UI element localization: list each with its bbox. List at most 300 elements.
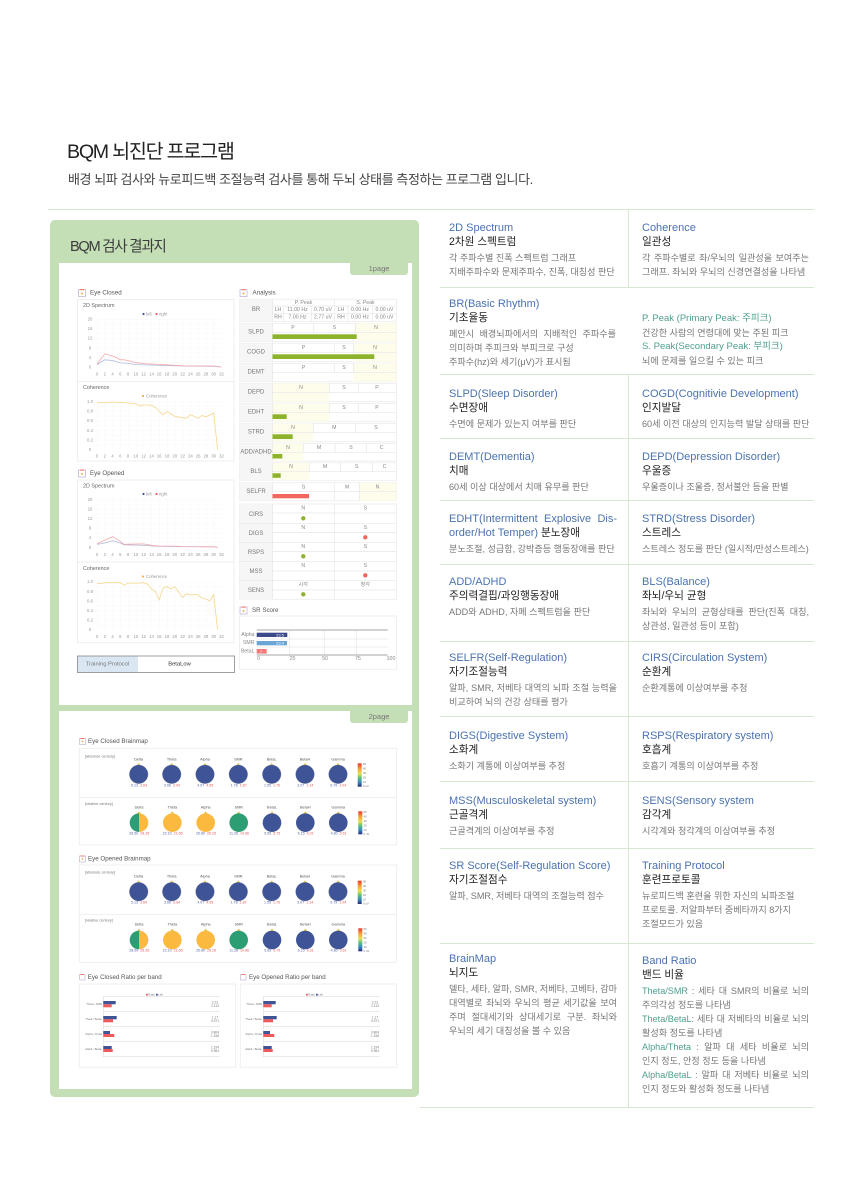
glossary: SENS: 감각계 bbox=[642, 809, 671, 821]
glossary: BR bbox=[449, 298, 616, 367]
table: organ systems: N bbox=[301, 525, 305, 531]
brainmap row: closed relative: Gamma bbox=[332, 806, 346, 810]
brainmap row: opened absolute: 4.07 bbox=[197, 901, 204, 905]
table row: BLS bbox=[240, 463, 396, 480]
chart: Eye Opened ratio bars: Alpha / BetaL bbox=[245, 1047, 262, 1051]
brainmap row: closed absolute: 0 uV bbox=[363, 784, 369, 788]
table row: STRD: S bbox=[374, 425, 378, 431]
brainmap row: closed relative: 40 bbox=[364, 814, 367, 818]
panel heading: BQM 검사 결과지 bbox=[70, 239, 165, 255]
heading: Eye Opened Ratio per band: Eye Opened Ratio per band bbox=[249, 974, 326, 981]
subtitle: 배경 뇌파 검사와 뉴로피드백 조절능력 검사를 통해 두뇌 상태를 측정하는 프로그램 입니다. bbox=[68, 172, 533, 187]
brainmap row: opened absolute: 4.55 bbox=[206, 901, 213, 905]
panel: Eye Closed Brainmap bbox=[79, 748, 397, 845]
brainmap row: opened absolute: 40 bbox=[363, 884, 367, 888]
chart: closed coherence: 26 bbox=[196, 454, 201, 458]
tab: 1page: 1page bbox=[369, 264, 389, 273]
brainmap row: closed absolute: 3.07 bbox=[297, 784, 304, 788]
brainmap row: opened relative: 5.65 bbox=[264, 948, 271, 952]
glossary: Training Protocol: 뉴로피드백 훈련을 위한 자신의 뇌파조절 bbox=[642, 891, 794, 901]
glossary: BrainMap: 델타, 세타, 알파, SMR, 저베타, 고베타, 감마 bbox=[449, 984, 617, 994]
heading: Analysis: Analysis bbox=[252, 290, 276, 296]
glossary: ADD/ADHD: 주의력결핍/과잉행동장애 bbox=[449, 590, 559, 602]
glossary: STRD bbox=[642, 512, 809, 554]
chart: opened coherence: 0 bbox=[96, 634, 99, 639]
table: organ systems: S bbox=[364, 525, 368, 531]
chart: Eye Closed ratio bars: 2.113 bbox=[211, 1004, 219, 1008]
chart: closed coherence: 18 bbox=[165, 454, 170, 458]
brainmap row: closed absolute: Theta bbox=[167, 758, 177, 762]
chart: Eye Closed ratio bars: Left bbox=[158, 993, 163, 997]
table row: DEPD: DEPD bbox=[248, 390, 265, 396]
glossary: DIGS: DIGS(Digestive System) bbox=[449, 730, 568, 742]
table row: BLS: N bbox=[289, 464, 293, 470]
brainmap row: opened relative: 5.61 bbox=[340, 948, 347, 952]
chart: opened coherence: 6 bbox=[119, 634, 122, 639]
chart: opened coherence: 0.2 bbox=[87, 618, 94, 623]
glossary: Band Ratio: Alpha/BetaL : 알파 대 저베타 비율로 뇌의 bbox=[642, 1070, 809, 1080]
brainmap row: opened absolute: Gamma bbox=[331, 874, 346, 878]
table row: COGD: N bbox=[373, 345, 377, 351]
glossary: peaks bbox=[642, 312, 788, 366]
glossary: peaks: 뇌에 문제를 일으킬 수 있는 피크 bbox=[642, 356, 763, 366]
table: organ systems: N bbox=[301, 544, 305, 550]
glossary: MSS: MSS(Musculoskeletal system) bbox=[449, 795, 596, 807]
chart: closed 2D spectrum: 32 bbox=[219, 372, 224, 376]
table row: DEPD: S bbox=[342, 385, 346, 391]
table: organ systems: N bbox=[301, 563, 305, 569]
chart: opened 2D spectrum: 16 bbox=[157, 552, 162, 557]
chart: closed coherence: 28 bbox=[204, 454, 209, 458]
chart: closed coherence: 30 bbox=[211, 454, 217, 458]
chart: Eye Closed ratio bars: 1.154 bbox=[211, 1046, 219, 1050]
training protocol box bbox=[78, 656, 234, 672]
glossary: SR Score: 알파, SMR, 저베타 대역의 조절능력 점수 bbox=[449, 891, 604, 901]
glossary: SR Score: SR Score(Self-Regulation Score) bbox=[449, 860, 610, 872]
brainmap row: closed absolute: 30 bbox=[363, 771, 367, 775]
table: organ systems: 시각 bbox=[299, 581, 308, 588]
brainmap row: closed relative: 26.80 bbox=[196, 832, 205, 836]
brainmap row: opened relative: 20 bbox=[364, 940, 367, 944]
chart: closed 2D spectrum: 30 bbox=[211, 372, 217, 376]
brainmap row: closed absolute: 3.66 bbox=[164, 784, 171, 788]
table row: SLPD: S bbox=[333, 325, 337, 331]
brainmap row: closed absolute: BetaH bbox=[300, 758, 311, 762]
chart: opened coherence: 14 bbox=[149, 634, 154, 639]
panel: Eye Opened Brainmap bbox=[79, 865, 397, 962]
chart: closed 2D spectrum: 14 bbox=[149, 372, 154, 376]
chart: closed coherence: 6 bbox=[119, 454, 122, 458]
chart: closed 2D spectrum: 16 bbox=[88, 326, 93, 331]
glossary: Band Ratio: 주의각성 정도를 나타냄 bbox=[642, 1000, 731, 1010]
glossary: Band Ratio: Theta/SMR : 세타 대 SMR의 비율로 뇌의 bbox=[642, 986, 809, 996]
table: organ systems: RSPS bbox=[248, 550, 264, 556]
chart: opened coherence: 0.8 bbox=[87, 589, 94, 594]
glossary: Coherence: 일관성 bbox=[642, 236, 671, 248]
glossary: Training Protocol bbox=[642, 860, 794, 929]
glossary: DEMT: DEMT(Dementia) bbox=[449, 451, 535, 463]
heading: Analysis bbox=[240, 289, 276, 296]
glossary: Band Ratio: 인지 정도, 안정 정도 등을 나타냄 bbox=[642, 1056, 766, 1066]
glossary: Band Ratio: 밴드 비율 bbox=[642, 969, 684, 981]
table row: EDHT bbox=[240, 403, 396, 422]
glossary: COGD: 인지발달 bbox=[642, 402, 681, 414]
table row: DEMT: S bbox=[342, 365, 346, 371]
brainmap row: closed relative: [relative century] bbox=[85, 802, 113, 806]
chart: Eye Closed ratio bars: Alpha / BetaL bbox=[85, 1047, 102, 1051]
glossary: Training Protocol: 조절모드가 있음 bbox=[642, 919, 703, 929]
brainmap row: closed absolute: 0.79 bbox=[330, 784, 337, 788]
chart: opened coherence: Coherence bbox=[83, 566, 109, 572]
brainmap row: closed absolute: 50 bbox=[363, 762, 367, 766]
chart: closed coherence: 32 bbox=[219, 454, 224, 458]
brainmap row: closed relative: 10 bbox=[364, 828, 367, 832]
table: BR: 0.00 uV bbox=[376, 314, 394, 320]
heading: Eye Opened: Eye Opened bbox=[90, 470, 125, 477]
glossary: STRD: 스트레스 bbox=[642, 526, 681, 538]
glossary: 2D Spectrum: 2D Spectrum bbox=[449, 222, 513, 234]
chart: closed coherence: Coherence bbox=[83, 385, 109, 391]
table row: DEPD bbox=[240, 383, 396, 402]
brainmap row: opened absolute: 3.66 bbox=[164, 901, 171, 905]
table: organ systems: MSS bbox=[249, 569, 263, 575]
chart: opened coherence: 16 bbox=[157, 634, 162, 639]
brainmap row: closed absolute: 40 bbox=[363, 766, 367, 770]
chart: SR Score bars: 23.4 bbox=[276, 641, 285, 646]
chart: Eye Opened ratio bars: Right bbox=[308, 993, 315, 997]
glossary: Band Ratio: Band Ratio bbox=[642, 955, 696, 967]
brainmap row: closed relative: 10.86 bbox=[240, 832, 249, 836]
glossary: BR: 기초율동 bbox=[449, 312, 488, 324]
chart: closed coherence: 10 bbox=[134, 454, 139, 458]
chart: closed 2D spectrum: 6 bbox=[119, 372, 122, 376]
heading: SR Score bbox=[240, 606, 279, 614]
glossary: DIGS: 소화계 bbox=[449, 744, 478, 756]
table row: STRD bbox=[240, 423, 396, 442]
glossary: 2D Spectrum: 각 주파수별 진폭 스펙트럼 그래프 bbox=[449, 253, 576, 263]
brainmap row: closed relative: 26.28 bbox=[207, 832, 216, 836]
table: BR bbox=[240, 299, 396, 321]
table row: DEPD: P bbox=[375, 385, 379, 391]
glossary: SLPD bbox=[449, 388, 576, 428]
brainmap row: closed absolute: SMR bbox=[234, 758, 243, 762]
brainmap row: closed relative: 20 bbox=[364, 824, 367, 828]
brainmap row: opened relative: Gamma bbox=[332, 922, 346, 926]
glossary: Band Ratio: Theta/BetaL: 세타 대 저베타의 비율로 뇌의 bbox=[642, 1014, 809, 1024]
table row: BLS: C bbox=[383, 464, 387, 470]
table row: BLS: M bbox=[323, 464, 327, 470]
table row: EDHT: P bbox=[375, 405, 379, 411]
chart: SR Score bars: BetaL bbox=[241, 648, 255, 654]
chart: closed 2D spectrum: 20 bbox=[172, 372, 178, 376]
glossary: Band Ratio: 인지 정도와 활성화 정도를 나타냄 bbox=[642, 1084, 769, 1094]
chart: closed 2D spectrum: 24 bbox=[188, 372, 193, 376]
glossary: STRD: 스트레스 정도를 판단 (일시적/만성스트레스) bbox=[642, 544, 809, 554]
brainmap row: closed absolute: Delta bbox=[134, 758, 144, 762]
chart: opened 2D spectrum: 14 bbox=[149, 552, 154, 557]
table row: DEMT: P bbox=[302, 365, 306, 371]
chart: closed coherence: Coherence bbox=[146, 394, 168, 398]
brainmap row: opened relative: BetaH bbox=[300, 922, 311, 926]
glossary: SELFR: 알파, SMR, 저베타 대역의 뇌파 조절 능력을 bbox=[449, 683, 617, 693]
chart: opened 2D spectrum: 4 bbox=[111, 552, 114, 557]
brainmap row: opened relative: 6.31 bbox=[307, 948, 314, 952]
chart: closed 2D spectrum: 2D Spectrum bbox=[83, 303, 115, 309]
chart: closed 2D spectrum: 10 bbox=[134, 372, 139, 376]
glossary: BLS: 좌뇌와 우뇌의 균형상태를 판단(진폭 대칭, bbox=[642, 607, 809, 617]
table: BR: P. Peak bbox=[295, 300, 313, 306]
chart: SR Score bars: 0 bbox=[257, 656, 260, 662]
chart: SR Score bars: 100 bbox=[387, 656, 395, 662]
chart: closed 2D spectrum: 22 bbox=[180, 372, 186, 376]
brainmap row: opened relative: Alpha bbox=[201, 922, 211, 926]
chart: Eye Opened ratio bars: 0.971 bbox=[371, 1019, 379, 1023]
table: BR: S. Peak bbox=[356, 300, 375, 306]
chart: opened coherence: 0 bbox=[89, 627, 92, 632]
table row: COGD: COGD bbox=[247, 350, 266, 356]
glossary: DEMT: 60세 이상 대상에서 치매 유무를 판단 bbox=[449, 482, 589, 492]
brainmap row: closed absolute: 3.64 bbox=[140, 784, 147, 788]
brainmap row: opened absolute: [absolute century] bbox=[85, 871, 115, 875]
chart: opened 2D spectrum: 18 bbox=[165, 552, 170, 557]
brainmap row: opened relative: Theta bbox=[167, 922, 178, 926]
glossary: EDHT bbox=[449, 512, 617, 554]
glossary: SENS bbox=[642, 795, 775, 836]
table row: ADD/ADHD: N bbox=[286, 445, 290, 451]
brainmap row: opened absolute: Theta bbox=[167, 874, 177, 878]
chart: opened coherence: 10 bbox=[134, 634, 139, 639]
chart: opened 2D spectrum: 20 bbox=[88, 497, 93, 502]
table row: STRD: STRD bbox=[248, 430, 265, 436]
glossary: ADD/ADHD bbox=[449, 576, 590, 617]
brainmap row: opened relative: 28.50 bbox=[129, 948, 138, 952]
brainmap row: opened absolute: 0 uV bbox=[363, 902, 369, 906]
table row: SLPD: P bbox=[291, 325, 295, 331]
page 1 sheet bbox=[59, 263, 412, 705]
brainmap row: opened relative: 11.28 bbox=[229, 948, 238, 952]
brainmap row: opened relative: 21.65 bbox=[174, 948, 183, 952]
chart: closed coherence: 0 bbox=[96, 454, 99, 458]
table: organ systems bbox=[240, 504, 396, 599]
chart: opened 2D spectrum: 8 bbox=[89, 526, 92, 531]
glossary: Band Ratio: Alpha/Theta : 알파 대 세타 비율로 뇌의 bbox=[642, 1042, 809, 1052]
glossary: BrainMap: 우뇌의 세기 대칭성을 볼 수 있음 bbox=[449, 1026, 570, 1036]
table row: ADD/ADHD bbox=[240, 443, 396, 461]
chart: opened 2D spectrum: 8 bbox=[127, 552, 130, 557]
brainmap row: opened relative: 50 bbox=[364, 927, 367, 931]
table row: EDHT: S bbox=[342, 405, 346, 411]
brainmap row: opened absolute: 1.76 bbox=[273, 901, 280, 905]
glossary: BrainMap: 뇌지도 bbox=[449, 967, 478, 979]
chart: closed coherence: 8 bbox=[127, 454, 130, 458]
chart: closed 2D spectrum: 0 bbox=[89, 364, 92, 370]
brainmap row: closed relative bbox=[85, 802, 369, 836]
glossary: 2D Spectrum bbox=[449, 222, 615, 277]
table: BR: 0.00 Hz bbox=[351, 314, 369, 320]
brainmap row: opened relative bbox=[85, 918, 369, 953]
table: organ systems: CIRS bbox=[249, 512, 263, 518]
brainmap row: closed relative: BetaL bbox=[267, 806, 277, 810]
brainmap row: opened absolute: SMR bbox=[234, 874, 243, 878]
glossary: Coherence: Coherence bbox=[642, 222, 696, 234]
brainmap row: closed absolute: 4.07 bbox=[197, 784, 204, 788]
glossary: DEPD: 우울증이나 조울증, 정서불안 등을 판별 bbox=[642, 482, 788, 492]
brainmap row: opened relative: 6.15 bbox=[298, 948, 305, 952]
glossary: DEMT: 치매 bbox=[449, 465, 468, 477]
brainmap row: closed relative: 11.28 bbox=[229, 832, 238, 836]
table row: DEMT: N bbox=[373, 365, 377, 371]
chart: SR Score bars: SMR bbox=[243, 640, 255, 646]
glossary: CIRS: CIRS(Circulation System) bbox=[642, 652, 767, 664]
brainmap row: opened relative: 0 uV bbox=[364, 949, 369, 953]
chart: Eye Closed ratio bars: 0.804 bbox=[211, 1030, 219, 1034]
chart: Eye Closed ratio bars: Theta / BetaL bbox=[85, 1017, 102, 1021]
chart: closed coherence: 14 bbox=[149, 454, 154, 458]
glossary: peaks: S. Peak(Secondary Peak: 부피크) bbox=[642, 341, 783, 352]
glossary: CIRS bbox=[642, 652, 767, 693]
table row: BLS: S bbox=[355, 464, 359, 470]
glossary: BR: 주파수(hz)와 세기(μV)가 표시됨 bbox=[449, 356, 571, 366]
chart: closed 2D spectrum: 12 bbox=[141, 372, 147, 376]
table row: SELFR: M bbox=[345, 484, 349, 490]
glossary: BLS: 상관성, 일관성 등이 포함) bbox=[642, 621, 739, 631]
chart: opened 2D spectrum: 2D Spectrum bbox=[83, 484, 115, 490]
brainmap row: opened absolute: 3.07 bbox=[297, 901, 304, 905]
chart: opened 2D spectrum: 12 bbox=[88, 516, 93, 521]
chart: SR Score bars: 50 bbox=[322, 656, 328, 662]
chart: closed 2D spectrum: 18 bbox=[165, 372, 170, 376]
chart: Eye Closed ratio bars: 1.158 bbox=[211, 1034, 219, 1038]
chart: opened 2D spectrum: 10 bbox=[134, 552, 139, 557]
glossary: Band Ratio: 활성화 정도를 나타냄 bbox=[642, 1028, 722, 1038]
brainmap row: closed absolute: 1.87 bbox=[240, 784, 247, 788]
heading: Eye Opened bbox=[78, 470, 125, 477]
brainmap row: closed absolute: 4.55 bbox=[206, 784, 213, 788]
glossary: STRD: STRD(Stress Disorder) bbox=[642, 512, 755, 524]
glossary: SELFR: 자기조절능력 bbox=[449, 666, 507, 678]
brainmap row: opened relative: [relative century] bbox=[85, 918, 113, 922]
chart: SR Score bars: 23.5 bbox=[276, 632, 285, 638]
brainmap row: opened relative: 26.80 bbox=[196, 948, 205, 952]
glossary: CIRS: 순환계통에 이상여부를 추청 bbox=[642, 683, 747, 693]
table: organ systems: SENS bbox=[248, 588, 264, 594]
tab: 1page bbox=[350, 263, 408, 275]
glossary: RSPS bbox=[642, 730, 773, 771]
table row: COGD: P bbox=[302, 345, 306, 351]
brainmap row: closed relative: 6.31 bbox=[307, 832, 314, 836]
chart: Eye Closed ratio bars: Theta / SMR bbox=[86, 1002, 102, 1006]
chart: Eye Closed ratio bars: 0.964 bbox=[211, 1049, 219, 1053]
chart: closed 2D spectrum: 8 bbox=[127, 372, 130, 376]
chart: Eye Opened ratio bars: 1.154 bbox=[371, 1046, 379, 1050]
chart: Eye Opened ratio bars: Alpha / Theta bbox=[245, 1032, 262, 1036]
chart: closed 2D spectrum: 8 bbox=[89, 345, 92, 350]
glossary: SENS: 시각계와 청각계의 이상여부를 추정 bbox=[642, 826, 775, 836]
training protocol box: Training Protocol bbox=[86, 662, 129, 668]
chart: opened coherence: 0.6 bbox=[87, 598, 94, 603]
chart: opened 2D spectrum: right bbox=[159, 492, 168, 496]
chart: opened coherence: 12 bbox=[141, 634, 147, 639]
glossary: Training Protocol: 훈련프로토콜 bbox=[642, 874, 700, 886]
brainmap row: opened absolute: 1.04 bbox=[339, 901, 346, 905]
table row: COGD bbox=[240, 343, 396, 362]
title: BQM 뇌진단 프로그램 bbox=[67, 141, 234, 163]
glossary: MSS: 근골격계 bbox=[449, 809, 488, 821]
chart: Eye Opened ratio bars: 1.17 bbox=[372, 1016, 378, 1020]
glossary: BrainMap bbox=[449, 953, 617, 1036]
chart: opened coherence: Coherence bbox=[146, 574, 168, 579]
glossary: BR: 의미하며 주피크와 부피크로 구성 bbox=[449, 342, 574, 352]
glossary: DIGS: 소화기 계통에 이상여부를 추정 bbox=[449, 761, 565, 771]
glossary: Training Protocol: 프로토콜. 저알파부터 중베타까지 8가지 bbox=[642, 905, 791, 915]
glossary: DEPD: DEPD(Depression Disorder) bbox=[642, 451, 780, 463]
brainmap row: closed relative: 22.10 bbox=[163, 832, 172, 836]
table row: BLS: BLS bbox=[250, 469, 262, 475]
glossary: SELFR: 비교하여 뇌의 건강 상태를 평가 bbox=[449, 697, 568, 707]
table: organ systems: N bbox=[301, 506, 305, 512]
table: organ systems: S bbox=[364, 506, 368, 512]
chart: opened coherence: 24 bbox=[188, 634, 193, 639]
chart: closed 2D spectrum: 0 bbox=[96, 372, 99, 376]
chart: opened 2D spectrum: 0 bbox=[89, 545, 92, 550]
chart: closed coherence: 20 bbox=[172, 454, 178, 458]
heading: SR Score: SR Score bbox=[252, 607, 279, 614]
chart: opened coherence: 26 bbox=[196, 634, 201, 639]
table row: SELFR bbox=[240, 483, 396, 501]
glossary: MSS bbox=[449, 795, 596, 836]
glossary: peaks: P. Peak (Primary Peak: 주피크) bbox=[642, 313, 772, 324]
glossary: 2D Spectrum: 지배주파수와 문제주파수, 진폭, 대칭성 판단 bbox=[449, 267, 615, 277]
chart: closed coherence: 0.6 bbox=[87, 418, 94, 423]
chart: opened coherence: 2 bbox=[104, 634, 107, 639]
glossary: EDHT: 분노조절, 성급함, 강박증등 행동장애를 판단 bbox=[449, 544, 615, 554]
chart: Eye Opened ratio bars: Left bbox=[318, 993, 323, 997]
chart: closed 2D spectrum: 26 bbox=[196, 372, 201, 376]
brainmap row: opened relative: 5.75 bbox=[273, 948, 280, 952]
panel: Eye Closed charts bbox=[78, 300, 234, 461]
brainmap row: closed absolute: [absolute century] bbox=[85, 755, 115, 759]
table row: COGD: S bbox=[342, 345, 346, 351]
chart: Eye Opened ratio bars: Theta / BetaL bbox=[245, 1017, 262, 1021]
heading: Eye Closed: Eye Closed bbox=[90, 290, 122, 296]
brainmap row: opened absolute: 1.87 bbox=[240, 901, 247, 905]
brainmap row: opened absolute: 0.79 bbox=[330, 901, 337, 905]
chart: opened 2D spectrum: 26 bbox=[196, 552, 201, 557]
chart: closed coherence: 12 bbox=[141, 454, 147, 458]
glossary: SLPD: 수면장애 bbox=[449, 402, 488, 414]
brainmap row: closed absolute: Alpha bbox=[200, 758, 211, 762]
table row: DEMT: DEMT bbox=[248, 370, 265, 376]
table row: STRD: N bbox=[291, 425, 295, 431]
table: BR: 11.00 Hz bbox=[287, 307, 308, 313]
chart: opened 2D spectrum: 16 bbox=[88, 506, 93, 511]
table row: SLPD: N bbox=[374, 325, 378, 331]
glossary: RSPS: 호흡기 계통의 이상여부를 추정 bbox=[642, 761, 758, 771]
chart: closed 2D spectrum: right bbox=[159, 312, 168, 316]
glossary: RSPS: 호흡계 bbox=[642, 744, 671, 756]
chart: opened 2D spectrum: 28 bbox=[204, 552, 209, 557]
chart: Eye Opened ratio bars: 1.158 bbox=[371, 1034, 379, 1038]
chart: SR Score bars bbox=[240, 616, 396, 669]
chart: closed coherence bbox=[83, 385, 224, 458]
glossary: DEMT bbox=[449, 451, 589, 492]
brainmap row: closed relative: 50 bbox=[364, 810, 367, 814]
brainmap row: closed relative: SMR bbox=[234, 806, 243, 810]
brainmap row: opened absolute: 1.78 bbox=[231, 901, 238, 905]
glossary: Band Ratio bbox=[642, 955, 809, 1094]
chart: closed 2D spectrum: 12 bbox=[88, 336, 93, 341]
chart: opened coherence: 8 bbox=[127, 634, 130, 639]
